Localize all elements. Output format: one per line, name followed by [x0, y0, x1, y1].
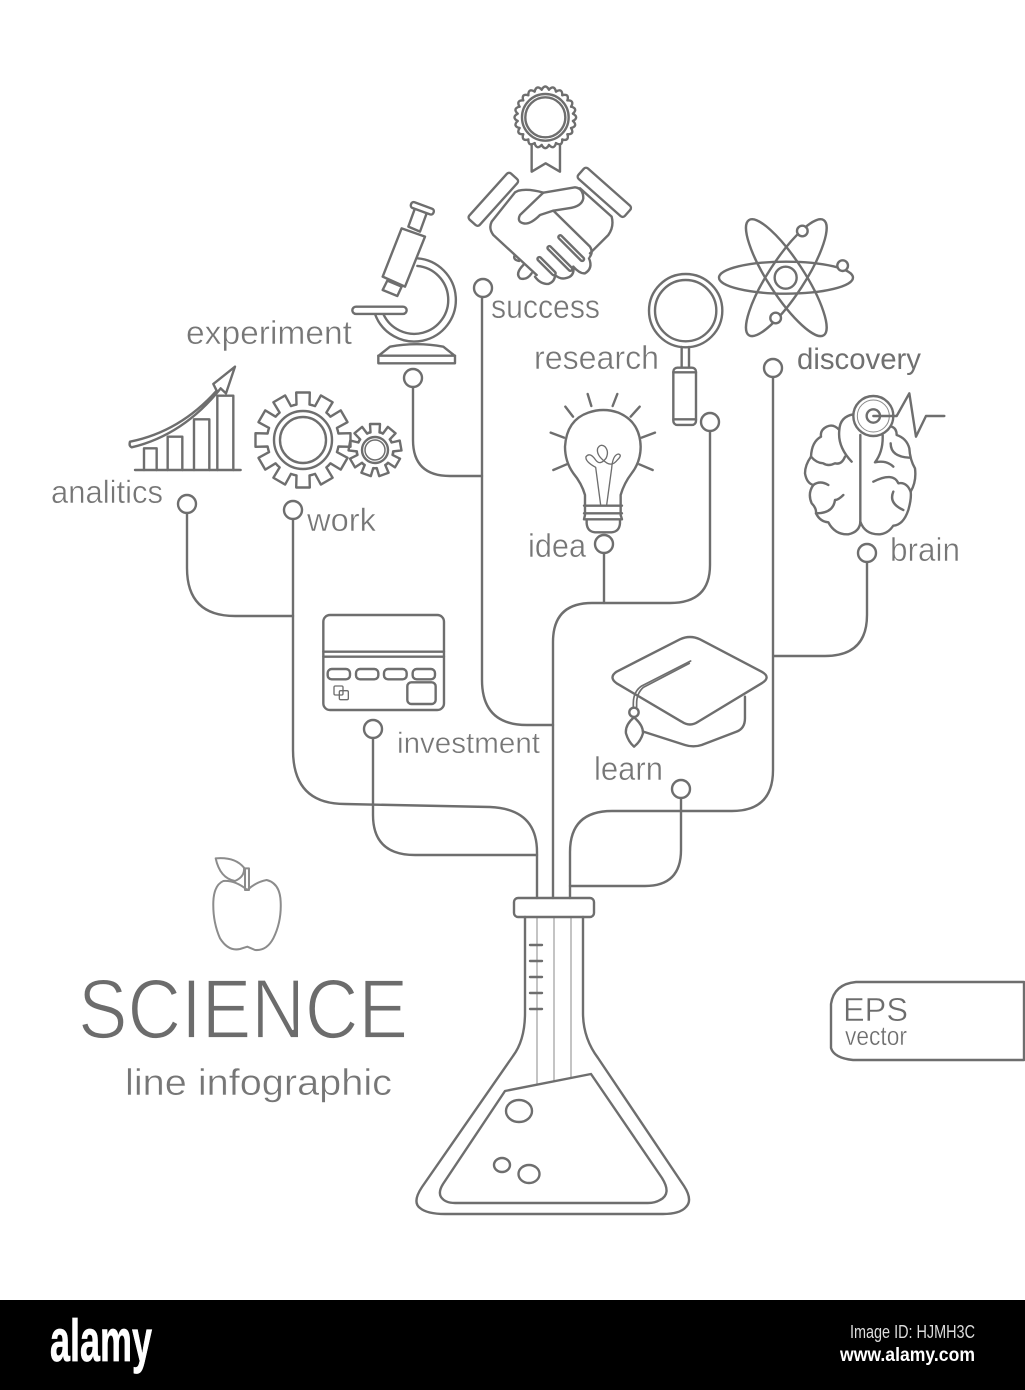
icon: microscope — [352, 201, 456, 363]
icon: light bulb — [551, 394, 655, 532]
connector node: brain — [858, 544, 876, 562]
connector node: success — [474, 279, 492, 297]
label: investment: investment — [397, 727, 541, 760]
footer image id: Image ID: HJMH3C — [850, 1322, 975, 1342]
connector lines tree — [187, 297, 867, 898]
icon: brain with pulse — [805, 393, 944, 534]
label: analitics: analitics — [51, 474, 163, 510]
connector node: work — [284, 501, 302, 519]
EPS vector badge — [831, 982, 1024, 1060]
label: research: research — [534, 339, 659, 376]
subtitle: line infographic — [125, 1062, 392, 1103]
icon: graduation cap — [612, 637, 767, 747]
connector node: analitics — [178, 495, 196, 513]
connector node: research — [701, 413, 719, 431]
label: learn: learn — [594, 750, 663, 787]
footer logo: alamy — [50, 1308, 152, 1374]
label: idea: idea — [528, 527, 587, 564]
label: discovery: discovery — [797, 343, 921, 376]
EPS vector badge: vector — [845, 1021, 907, 1051]
connector node: learn — [672, 780, 690, 798]
connector node: experiment — [404, 369, 422, 387]
icon: handshake — [467, 167, 632, 284]
icon: gears — [256, 392, 402, 488]
icon: magnifier — [649, 274, 722, 425]
footer url: www.alamy.com — [839, 1345, 975, 1366]
icon: growth chart — [130, 367, 241, 470]
connector node: investment — [364, 720, 382, 738]
connector node: discovery — [764, 359, 782, 377]
title: SCIENCE — [78, 962, 408, 1056]
label: experiment: experiment — [186, 314, 352, 351]
icon: credit card — [323, 615, 444, 710]
footer bar — [0, 1300, 1025, 1390]
label: brain: brain — [890, 531, 960, 568]
EPS vector badge: EPS — [843, 991, 908, 1028]
label: success: success — [491, 288, 600, 325]
icon: medal — [514, 86, 576, 172]
connector node: idea — [595, 535, 613, 553]
icon: apple — [213, 858, 281, 950]
icon: flask — [416, 898, 689, 1214]
label: work: work — [306, 502, 377, 538]
icon: atom — [719, 210, 853, 345]
